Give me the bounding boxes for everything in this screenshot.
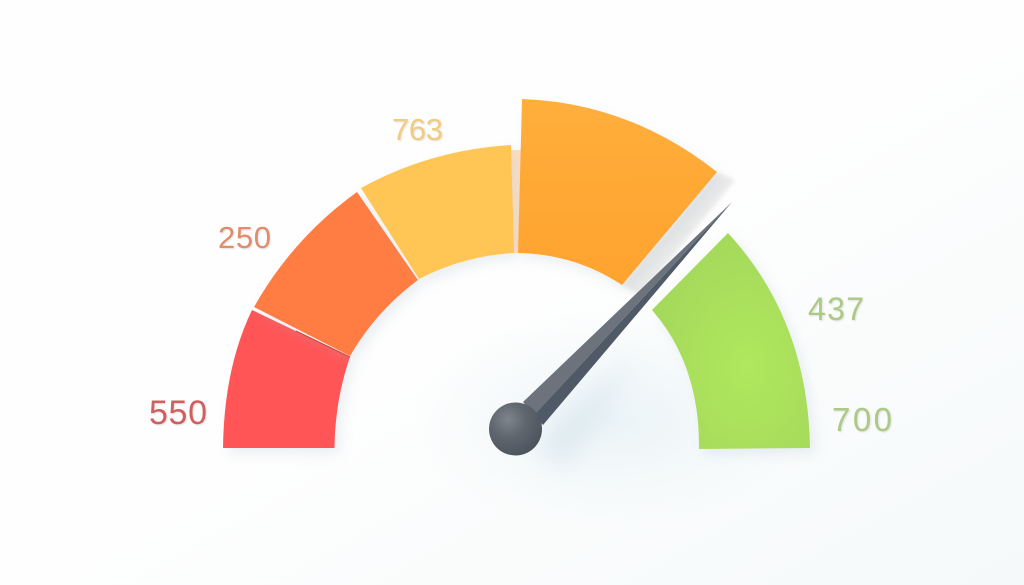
label: 550: 550 — [149, 394, 207, 432]
segment: yellow — [361, 145, 514, 279]
shadow band beside amber segment — [622, 172, 735, 296]
needle — [523, 202, 732, 425]
label: 437: 437 — [808, 291, 864, 327]
label: 700: 700 — [832, 401, 892, 438]
segment: orange — [254, 192, 418, 356]
needle lower facet — [534, 202, 732, 425]
segment: amber — [518, 99, 717, 285]
needle upper facet — [523, 202, 732, 415]
needle hub — [489, 402, 542, 456]
needle shadow — [535, 350, 640, 470]
gap fill between yellow and amber — [511, 150, 523, 253]
label: 763: 763 — [392, 112, 443, 147]
segment: green — [652, 233, 810, 449]
segment: red — [223, 310, 350, 448]
label: 250: 250 — [218, 220, 271, 255]
seam line between red and orange — [296, 331, 350, 357]
